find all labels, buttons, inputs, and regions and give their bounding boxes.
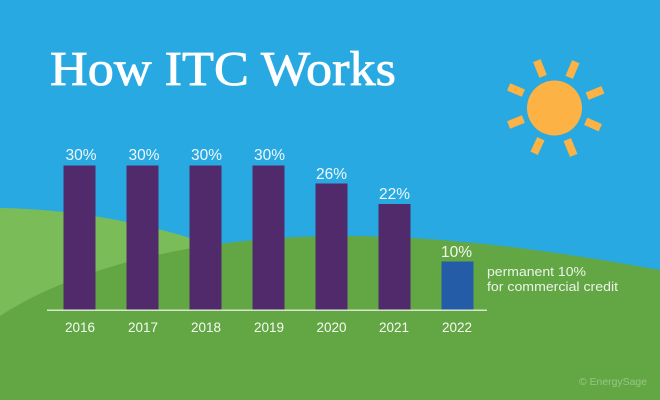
bar: 2022 [442, 262, 474, 310]
callout: permanent commercial credit: permanent 10% [487, 265, 586, 279]
bars: 2016 to 2021 [64, 166, 410, 310]
value labels: 30% [254, 147, 285, 164]
value labels: 30% [65, 147, 97, 164]
title: How ITC Works [50, 41, 396, 96]
value labels: 10% [441, 244, 472, 261]
value labels: 30% [191, 147, 222, 164]
year labels: 2020 [316, 320, 347, 335]
light green back hill [0, 208, 260, 330]
copyright credit: © EnergySage [579, 376, 647, 388]
year labels: 2022 [442, 320, 472, 335]
year labels: 2021 [379, 320, 409, 335]
value labels: 30% [128, 147, 160, 164]
dark green front hill [0, 236, 660, 400]
callout: permanent commercial credit: for commercial credit [487, 280, 619, 294]
axis line [47, 310, 487, 311]
value labels: 26% [316, 166, 347, 183]
value labels [65, 147, 472, 261]
icon: sun [507, 59, 604, 157]
year labels: 2019 [254, 320, 284, 335]
value labels: 22% [379, 186, 410, 203]
year labels: 2016 [65, 320, 95, 335]
year labels: 2017 [128, 320, 158, 335]
callout: permanent commercial credit [487, 265, 619, 294]
bar chart [47, 147, 487, 335]
year labels [65, 320, 472, 335]
year labels: 2018 [191, 320, 221, 335]
